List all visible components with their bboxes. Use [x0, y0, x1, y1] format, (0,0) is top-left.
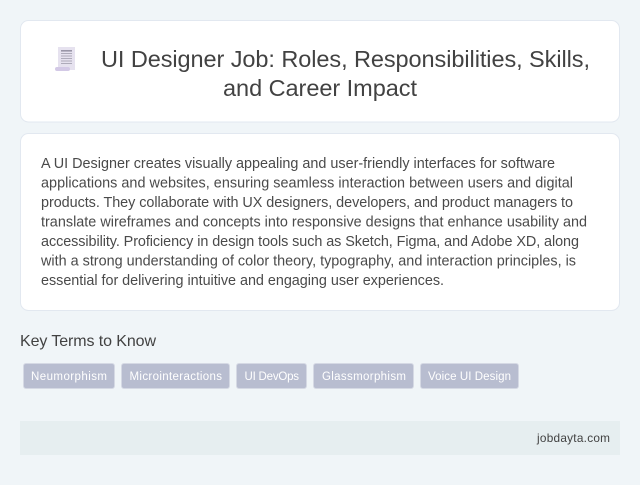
- title: [101, 46, 590, 101]
- tag: Microinteractions: [122, 364, 230, 388]
- text block: description: with a strong understanding of color theory, typography, and interaction principles, is: [40, 254, 576, 270]
- footer bar: [20, 421, 620, 455]
- panel: description: [20, 134, 620, 310]
- text block: description: [40, 156, 587, 289]
- title: and Career Impact: [223, 75, 417, 101]
- tag: Neumorphism: Neumorphism: [31, 371, 107, 383]
- icon: document scroll: [55, 47, 75, 71]
- tag: Neumorphism: [24, 364, 114, 388]
- tag: UI DevOps: UI DevOps: [244, 371, 299, 383]
- text block: description: products. They collaborate with UX designers, developers, and product managers to: [41, 195, 573, 211]
- tag: Microinteractions: Microinteractions: [130, 371, 222, 383]
- text block: description: applications and websites, ensuring seamless interaction between users and digital: [41, 176, 573, 192]
- heading: key terms: Key Terms to Know: [20, 333, 156, 350]
- tag: Glassmorphism: [314, 364, 414, 388]
- tag: Voice UI Design: Voice UI Design: [428, 371, 511, 383]
- tag: UI DevOps: [236, 364, 306, 388]
- tag: Glassmorphism: Glassmorphism: [322, 371, 406, 383]
- text block: description: essential for delivering intuitive and engaging user experiences.: [41, 273, 444, 289]
- text block: description: accessibility. Proficiency in design tools such as Sketch, Figma, and Adobe XD, along: [41, 234, 579, 250]
- footer source text: jobdayta.com: [536, 431, 610, 445]
- text block: description: translate wireframes and concepts into responsive designs that enhance usability and: [41, 214, 587, 230]
- title: UI Designer Job: Roles, Responsibilities, Skills,: [101, 46, 590, 72]
- tag list: [24, 364, 518, 388]
- text block: description: A UI Designer creates visually appealing and user-friendly interfaces for software: [41, 156, 555, 172]
- tag: Voice UI Design: [420, 364, 518, 388]
- panel: header: [20, 20, 620, 122]
